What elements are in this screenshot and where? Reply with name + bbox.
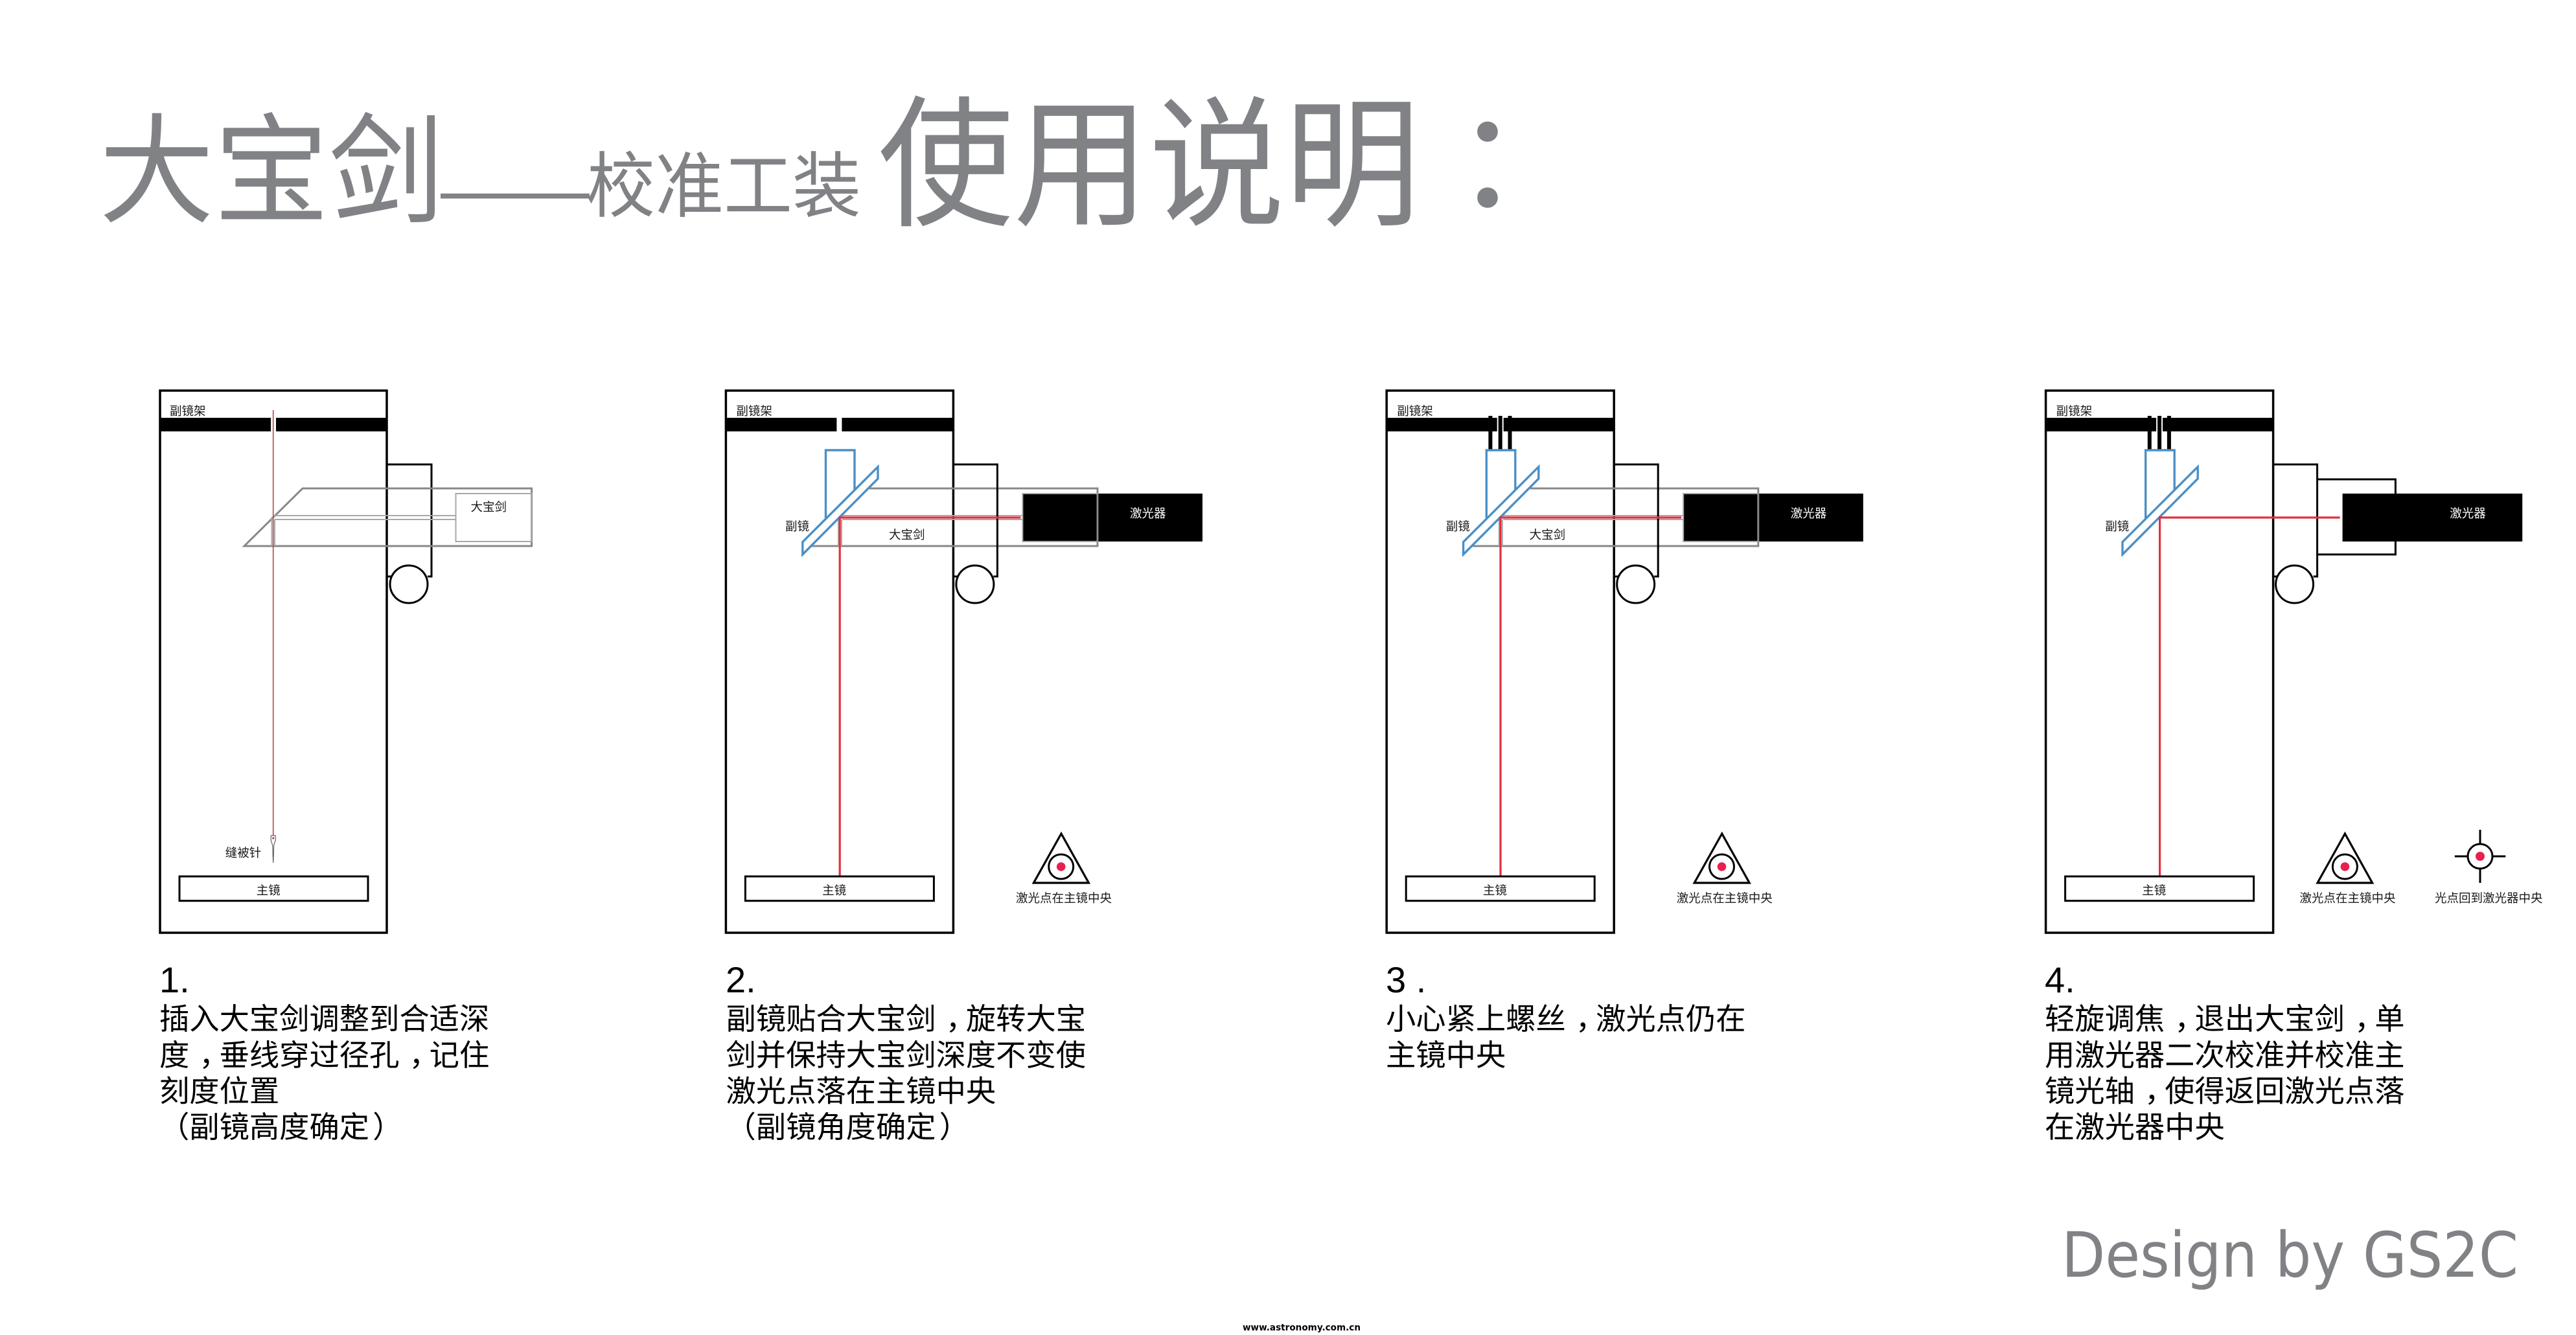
- watermark url: www.astronomy.com.cn: [1243, 1323, 1361, 1333]
- caption: laser dot in primary centre: 激光点在主镜中央: [1016, 891, 1112, 905]
- label: secondary mirror: 副镜: [1446, 519, 1470, 533]
- label: secondary mirror holder: 副镜架: [736, 404, 772, 418]
- text block: step 2: 副镜贴合大宝剑 ，旋转大宝: [726, 1002, 1086, 1036]
- screws: [2148, 416, 2171, 450]
- text block: step 2: （副镜角度确定）: [726, 1103, 969, 1147]
- laser body: [1022, 494, 1202, 542]
- text block: step 4: [2045, 959, 2405, 1144]
- caption: laser dot in primary centre: 激光点在主镜中央: [2300, 891, 2396, 905]
- secondary mirror frame outer box: [160, 391, 387, 933]
- label: secondary mirror: 副镜: [785, 519, 809, 533]
- label: laser: 激光器: [2450, 507, 2486, 520]
- focuser knob: [390, 565, 428, 603]
- focuser extension holder: [2317, 479, 2395, 554]
- text block: step 2: 2.: [726, 959, 756, 1000]
- big sword tool outline: [1473, 488, 1758, 546]
- icon: laser dot in primary centre: [1694, 834, 1749, 883]
- secondary mirror: [1464, 467, 1539, 554]
- secondary mirror: [803, 467, 878, 554]
- text block: step 1: 度 ，垂线穿过径孔 ，记住: [159, 1038, 489, 1072]
- label: secondary mirror holder: 副镜架: [1397, 404, 1433, 418]
- spider bar solid: [2046, 418, 2273, 431]
- title: 校准工装: [586, 147, 861, 227]
- primary mirror: [2065, 876, 2254, 901]
- focuser bracket: [387, 464, 431, 576]
- text block: step 4: 镜光轴 ，使得返回激光点落: [2045, 1074, 2405, 1108]
- primary mirror: [179, 876, 368, 901]
- plumb line: [273, 410, 274, 837]
- text block: step 3: 主镜中央: [1386, 1038, 1506, 1072]
- panel: step 4 diagram: [2046, 391, 2543, 933]
- text block: step 3: 小心紧上螺丝 ，激光点仍在: [1386, 1002, 1746, 1036]
- text block: step 1: [159, 959, 489, 1147]
- label: secondary mirror: 副镜: [2105, 519, 2129, 533]
- laser body: [1683, 494, 1863, 542]
- label: laser: 激光器: [1791, 507, 1826, 520]
- secondary mirror frame outer box: [2046, 391, 2273, 933]
- secondary mirror: [2122, 467, 2198, 554]
- text block: step 4: 在激光器中央: [2045, 1110, 2225, 1144]
- secondary mirror holder tube: [2146, 450, 2174, 518]
- label: big sword: 大宝剑: [1530, 528, 1565, 542]
- text block: step 1: 插入大宝剑调整到合适深: [159, 1002, 489, 1036]
- title: ：: [1420, 59, 1555, 254]
- text block: step 3: 3 .: [1386, 959, 1426, 1000]
- text block: step 1: 刻度位置: [159, 1074, 279, 1108]
- big sword tool outline: [244, 488, 532, 546]
- label: primary mirror: 主镜: [822, 884, 846, 897]
- icon: sewing needle: [271, 836, 275, 863]
- label: primary mirror: 主镜: [257, 884, 281, 897]
- secondary mirror frame outer box: [726, 391, 953, 933]
- secondary mirror frame outer box: [1386, 391, 1614, 933]
- label: sewing needle: 缝被针: [225, 846, 261, 860]
- label: secondary mirror holder: 副镜架: [170, 404, 206, 418]
- laser beam: [1501, 518, 1681, 876]
- laser body: [2343, 494, 2522, 542]
- label: big sword: 大宝剑: [470, 500, 507, 514]
- focuser knob: [2276, 565, 2314, 603]
- spider bar with centre hole: [160, 418, 387, 431]
- text block: step 4: 轻旋调焦 ，退出大宝剑 ，单: [2045, 1002, 2405, 1036]
- caption: returned dot at laser centre: 光点回到激光器中央: [2435, 891, 2543, 905]
- primary mirror: [1406, 876, 1594, 901]
- laser beam: [840, 518, 1020, 876]
- label: laser: 激光器: [1130, 507, 1166, 520]
- text block: step 1: 1.: [159, 959, 190, 1000]
- label: big sword: 大宝剑: [889, 528, 925, 542]
- title: 使用说明: [878, 87, 1420, 245]
- icon: laser dot in primary centre: [1033, 834, 1088, 883]
- big sword tool outline: [812, 488, 1098, 546]
- text block: step 3: [1386, 959, 1746, 1072]
- title: [99, 59, 1555, 254]
- panel: step 2 diagram: [726, 391, 1202, 933]
- title: 大宝剑: [99, 105, 444, 238]
- text block: step 4: 4.: [2045, 959, 2075, 1000]
- focuser bracket: [953, 464, 997, 576]
- label: primary mirror: 主镜: [1483, 884, 1507, 897]
- spider bar solid: [1386, 418, 1614, 431]
- text block: step 2: 激光点落在主镜中央: [726, 1074, 996, 1108]
- panel: step 3 diagram: [1386, 391, 1863, 933]
- icon: laser dot in primary centre: [2317, 834, 2373, 883]
- focuser knob: [1617, 565, 1655, 603]
- label: secondary mirror holder: 副镜架: [2056, 404, 2092, 418]
- focuser knob: [956, 565, 994, 603]
- text block: step 1: （副镜高度确定）: [159, 1103, 402, 1147]
- focuser bracket: [2273, 464, 2317, 576]
- text block: step 4: 用激光器二次校准并校准主: [2045, 1038, 2405, 1072]
- icon: returned dot crosshair: [2455, 830, 2505, 883]
- primary mirror: [745, 876, 934, 901]
- screws: [1488, 416, 1512, 450]
- focuser bracket: [1614, 464, 1658, 576]
- secondary mirror holder tube: [1486, 450, 1515, 518]
- secondary mirror holder tube: [825, 450, 855, 518]
- panel: step 1 diagram: [160, 391, 532, 933]
- label: primary mirror: 主镜: [2142, 884, 2166, 897]
- credit: designer: Design by GS2C: [2062, 1219, 2518, 1292]
- text block: step 2: [726, 959, 1086, 1147]
- spider bar with centre hole: [726, 418, 953, 431]
- title: ——: [441, 148, 590, 231]
- text block: step 2: 剑并保持大宝剑深度不变使: [726, 1038, 1086, 1072]
- caption: laser dot in primary centre: 激光点在主镜中央: [1677, 891, 1773, 905]
- laser beam: [2160, 518, 2340, 876]
